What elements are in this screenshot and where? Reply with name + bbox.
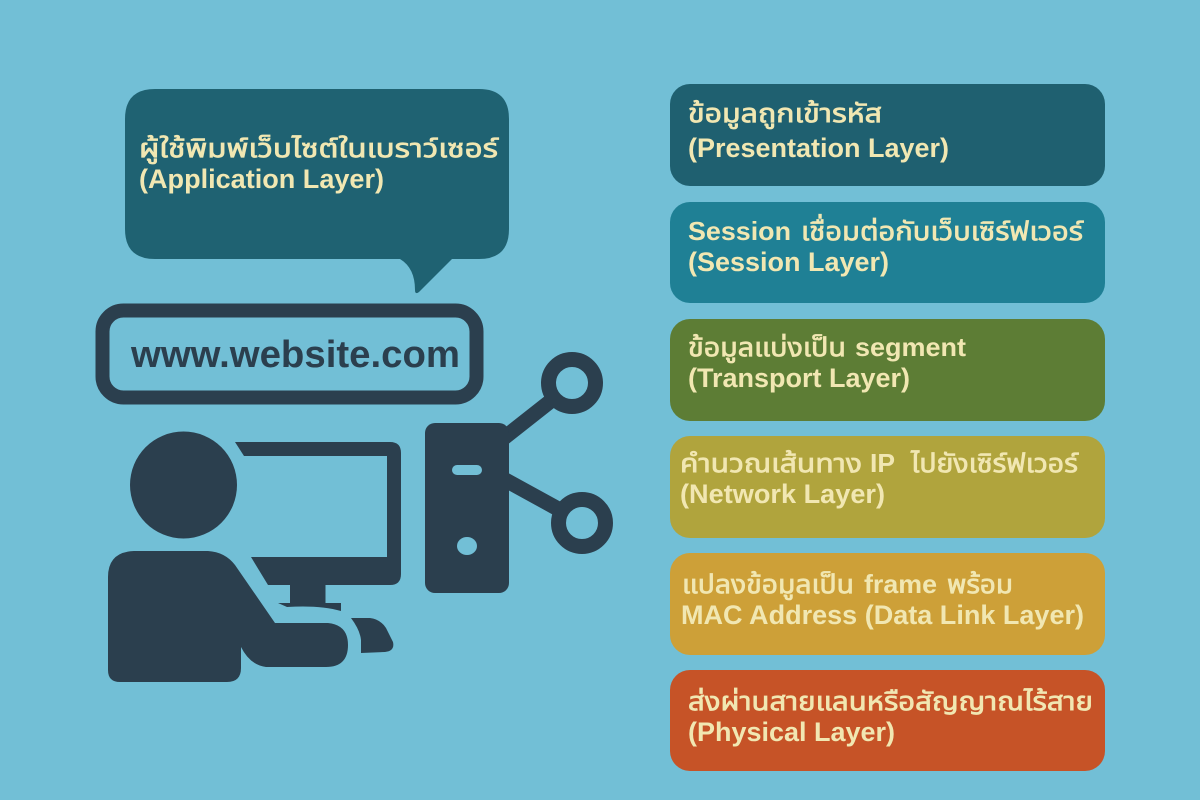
speech bubble: application layer: ผู้ใช้พิมพ์เว็บไซต์ในเบราว์เซอร์ bbox=[139, 135, 500, 164]
icon: computer tower with network nodes bbox=[425, 360, 606, 593]
panel: data link layer: frame bbox=[864, 569, 937, 599]
address bar: www.website.com bbox=[102, 310, 476, 398]
panel: transport layer: ข้อมูลแบ่งเป็น bbox=[688, 334, 846, 363]
network node bottom bbox=[558, 500, 606, 546]
panel: network layer: คำนวณเส้นทาง bbox=[680, 450, 862, 478]
panel: session layer bbox=[670, 202, 1105, 303]
network node top bbox=[548, 360, 596, 406]
icon: monitor bbox=[235, 442, 401, 611]
panel: transport layer: segment bbox=[855, 332, 966, 362]
panel: network layer: IP bbox=[870, 448, 895, 478]
panel: data link layer: แปลงข้อมูลเป็น bbox=[682, 571, 854, 600]
icon: user body bbox=[108, 551, 348, 682]
icon: user head bbox=[130, 432, 237, 538]
panel: network layer bbox=[670, 436, 1105, 538]
panel: transport layer: (Transport Layer) bbox=[688, 363, 910, 393]
panel: data link layer: พร้อม bbox=[947, 571, 1013, 599]
panel: network layer: ไปยังเซิร์ฟเวอร์ bbox=[910, 450, 1079, 478]
speech bubble: application layer bbox=[125, 89, 509, 293]
panel: data link layer: MAC Address (Data Link Layer) bbox=[681, 600, 1084, 630]
panel: session layer: Session bbox=[688, 216, 791, 246]
speech bubble: application layer: (Application Layer) bbox=[139, 164, 384, 194]
panel: presentation layer: (Presentation Layer) bbox=[688, 133, 949, 163]
panel: physical layer: (Physical Layer) bbox=[688, 717, 895, 747]
icon: user at computer bbox=[108, 432, 401, 682]
panel: physical layer bbox=[670, 670, 1105, 771]
panel: presentation layer: ข้อมูลถูกเข้ารหัส bbox=[688, 100, 882, 129]
icon: mouse bbox=[351, 618, 393, 653]
computer tower bbox=[425, 423, 509, 593]
tower button bbox=[457, 537, 477, 555]
network links bbox=[500, 400, 560, 510]
panel: session layer: เชื่อมต่อกับเว็บเซิร์ฟเวอร์ bbox=[801, 214, 1084, 246]
panel: network layer: (Network Layer) bbox=[680, 479, 885, 509]
panel: presentation layer bbox=[670, 84, 1105, 186]
panel: session layer: (Session Layer) bbox=[688, 247, 889, 277]
tower slot bbox=[452, 465, 482, 475]
panel: transport layer bbox=[670, 319, 1105, 421]
panel: data link layer bbox=[670, 553, 1105, 655]
panel: physical layer: ส่งผ่านสายแลนหรือสัญญาณไร้สาย bbox=[688, 688, 1093, 716]
address bar: www.website.com: www.website.com bbox=[130, 334, 460, 376]
